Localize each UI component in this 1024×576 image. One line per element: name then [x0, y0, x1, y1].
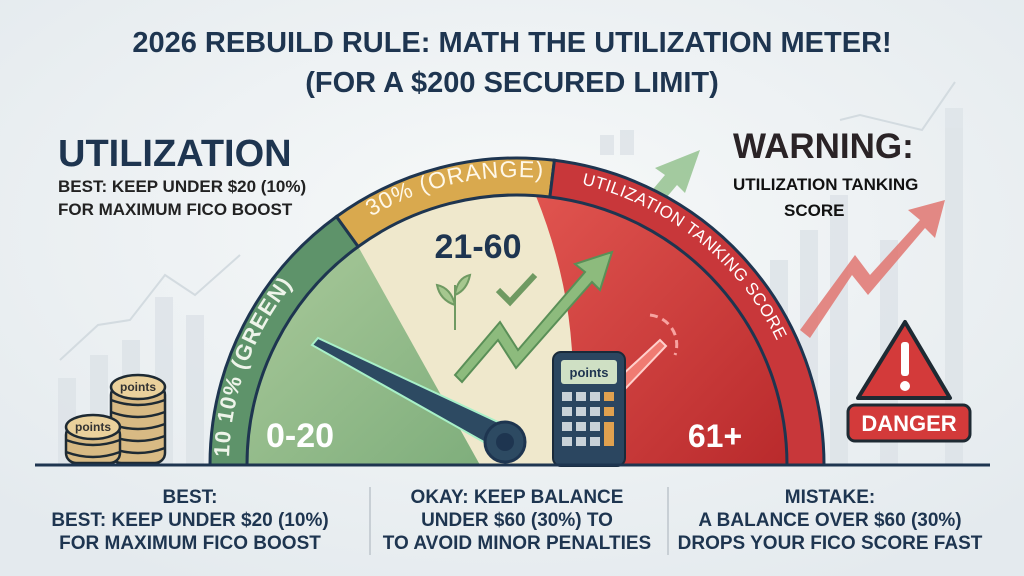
bottom text columns	[51, 487, 983, 554]
left heading: utilization: BEST: KEEP UNDER $20 (10%)	[58, 177, 306, 196]
calculator	[553, 352, 625, 466]
bottom text columns: UNDER $60 (30%) TO	[421, 510, 613, 531]
plant & check	[437, 275, 470, 330]
text: points	[75, 420, 111, 434]
zone numbers: 0-20	[266, 417, 334, 455]
bottom text columns: MISTAKE:	[785, 487, 875, 508]
red needle	[595, 340, 666, 410]
warning heading: SCORE	[784, 201, 844, 220]
gauge	[208, 156, 826, 464]
gauge: UTILIZATION TANKING SCORE	[584, 173, 787, 340]
title	[132, 27, 892, 99]
left heading: utilization	[58, 133, 306, 219]
gauge: 30% (ORANGE)	[366, 160, 542, 215]
left heading: utilization: FOR MAXIMUM FICO BOOST	[58, 200, 293, 219]
danger sign	[848, 322, 970, 441]
background bars	[58, 108, 963, 465]
warning heading: WARNING:	[733, 127, 914, 166]
bottom text columns: TO AVOID MINOR PENALTIES	[383, 533, 651, 554]
green arrow	[610, 150, 700, 250]
warning heading: UTILIZATION TANKING	[733, 175, 918, 194]
needle	[312, 338, 515, 450]
red arrow	[800, 200, 945, 338]
left heading: utilization: UTILIZATION	[58, 133, 292, 175]
calculator: points	[570, 365, 608, 380]
gauge: 61+	[688, 418, 742, 454]
danger sign: DANGER	[861, 411, 957, 436]
bottom text columns: FOR MAXIMUM FICO BOOST	[59, 533, 321, 554]
title: (FOR A $200 SECURED LIMIT)	[305, 67, 719, 99]
band labels: 10 10% (GREEN)	[214, 278, 294, 456]
zigzag arrow	[455, 252, 612, 382]
bottom text columns: OKAY: KEEP BALANCE	[411, 487, 623, 508]
coins	[66, 375, 165, 463]
title: 2026 REBUILD RULE: MATH THE UTILIZATION METER!	[132, 27, 892, 59]
text: points	[120, 380, 156, 394]
bottom text columns: DROPS YOUR FICO SCORE FAST	[678, 533, 983, 554]
gauge: 21-60	[435, 228, 521, 266]
bottom text columns: BEST:	[163, 487, 217, 508]
warning heading	[733, 127, 918, 220]
bottom text columns: BEST: KEEP UNDER $20 (10%)	[51, 510, 329, 531]
baseline	[35, 464, 990, 466]
bottom text columns: A BALANCE OVER $60 (30%)	[698, 510, 962, 531]
